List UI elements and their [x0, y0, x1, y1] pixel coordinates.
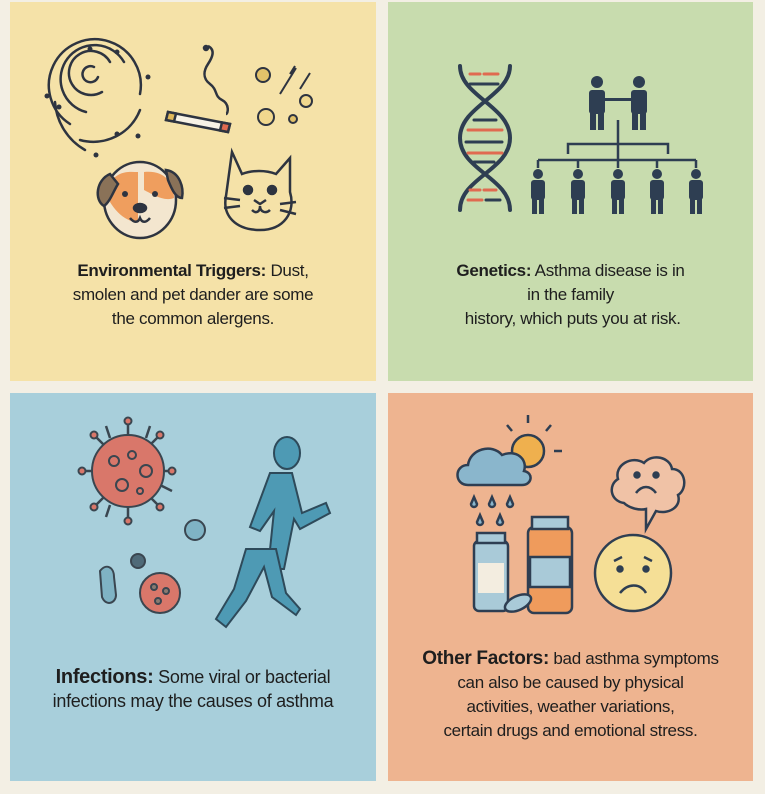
text: other factors: activities, weather variations, [466, 697, 674, 716]
panel: infections [10, 393, 376, 781]
text: environmental triggers [73, 261, 313, 328]
icon: cloud sun rain [458, 415, 562, 525]
icon: runner [216, 437, 330, 627]
text: genetics: history, which puts you at risk. [465, 309, 681, 328]
icon: sad face [595, 535, 671, 611]
icon: pollen [256, 66, 312, 125]
panel: environmental triggers [10, 2, 376, 381]
icon: large virus [78, 418, 176, 524]
icon: dog [98, 162, 182, 238]
icon: medicine bottles [474, 517, 572, 615]
icon: sad thought bubble [612, 457, 684, 529]
text: infections: Infections: Some viral or bacterial [56, 666, 330, 688]
icon: cat [224, 152, 296, 230]
text: infections: infections may the causes of asthma [53, 691, 333, 711]
text: other factors: can also be caused by physical [457, 673, 684, 692]
text: genetics [456, 261, 685, 328]
text: environmental triggers: Environmental Triggers: Dust, [77, 261, 309, 280]
icon: dna [460, 66, 510, 210]
text: infections [53, 666, 334, 711]
text: other factors [422, 648, 719, 740]
text: other factors: certain drugs and emotional stress. [443, 721, 698, 740]
icon: small viruses and bacteria [100, 520, 205, 613]
panel: genetics [388, 2, 753, 381]
icon: dust swirl [44, 38, 313, 240]
icon: cigarette [166, 46, 230, 132]
text: environmental triggers: smolen and pet dander are some [73, 285, 313, 304]
text: genetics: Genetics: Asthma disease is in [456, 261, 685, 280]
text: other factors: Other Factors: bad asthma symptoms [422, 648, 719, 669]
text: genetics: in the family [527, 285, 614, 304]
icon: family tree [589, 76, 647, 130]
text: environmental triggers: the common alergens. [112, 309, 274, 328]
panel: other factors [388, 393, 753, 781]
